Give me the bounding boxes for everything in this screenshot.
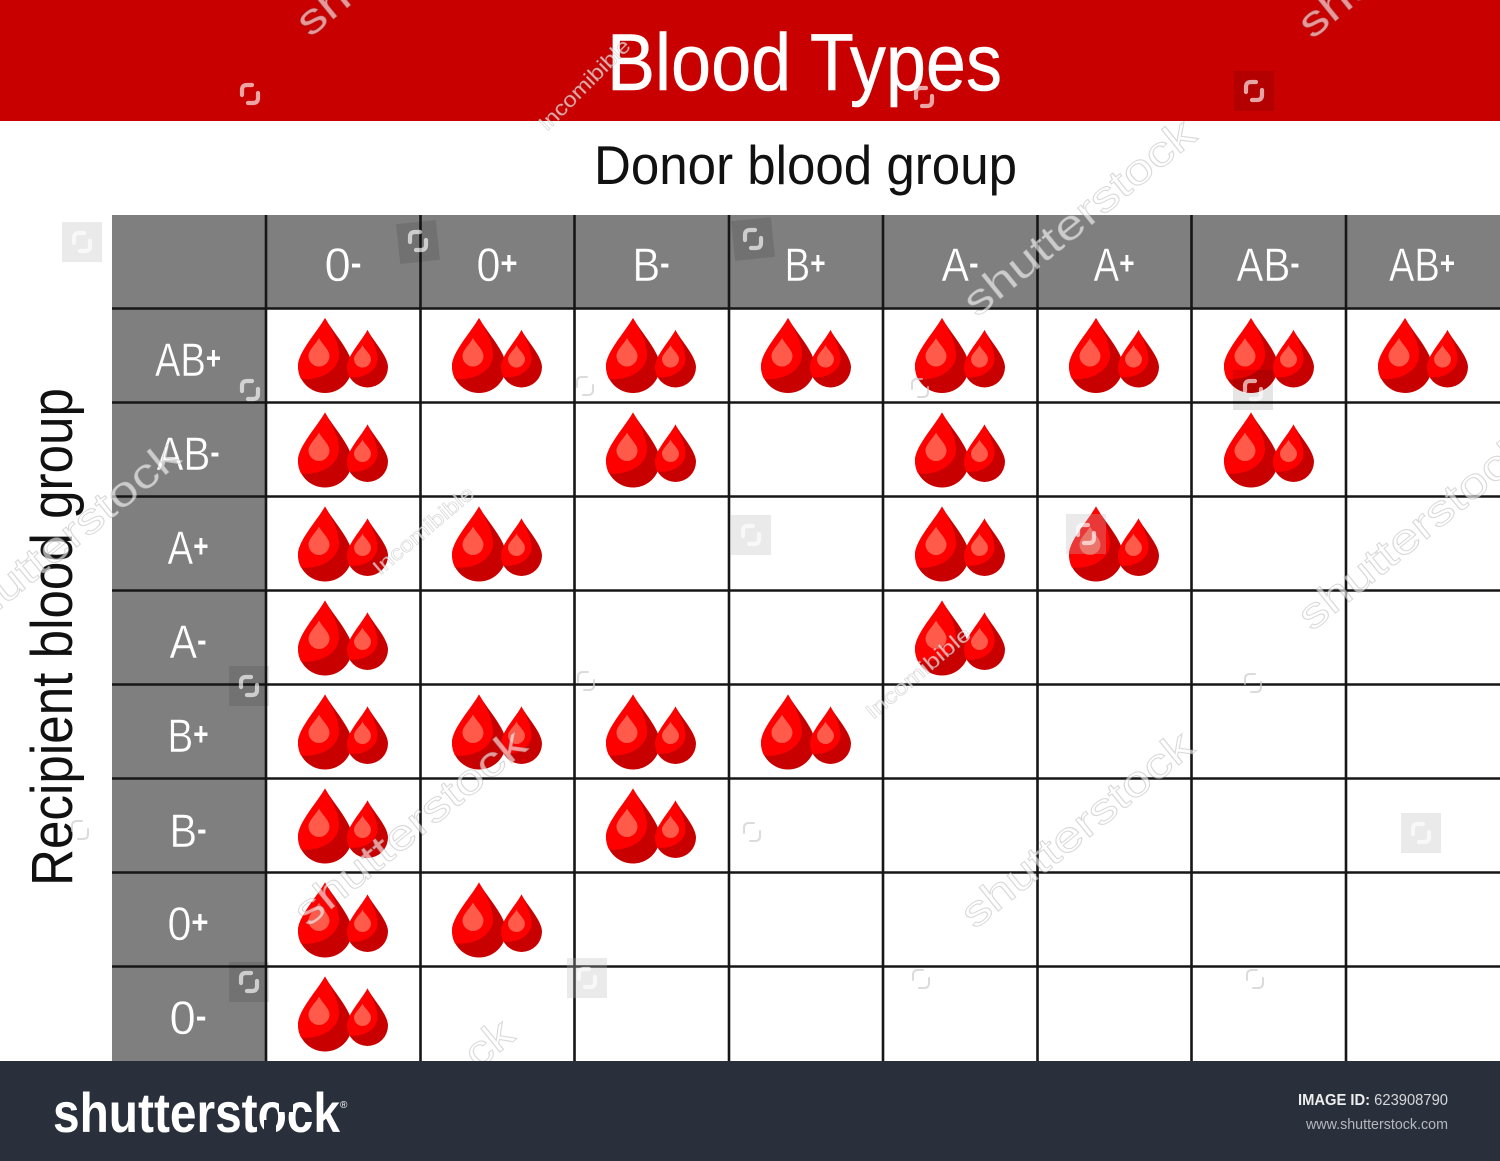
- logo registered mark: ®: [340, 1100, 348, 1111]
- image id: IMAGE ID: 623908790: [1298, 1092, 1448, 1109]
- donor column labels: 0: [476, 238, 503, 291]
- heading: recipient blood group: Recipient blood group: [20, 388, 85, 886]
- header column background: [112, 308, 266, 1061]
- recipient row labels: B: [170, 804, 201, 857]
- donor column labels: AB: [1389, 238, 1452, 291]
- watermark layer: shutterstock: [1288, 422, 1500, 639]
- recipient row labels: -: [197, 622, 206, 658]
- recipient row labels: B: [168, 709, 199, 762]
- donor column labels: [324, 238, 1455, 291]
- table grid lines: [112, 215, 1500, 1061]
- watermark layer: shutterstock: [953, 108, 1205, 325]
- row B+ drops: [298, 694, 851, 770]
- recipient row labels: -: [197, 811, 206, 847]
- donor column labels: -: [969, 245, 978, 281]
- recipient row labels: A: [170, 615, 201, 668]
- donor column labels: +: [810, 245, 826, 281]
- recipient row labels: [155, 333, 221, 1044]
- donor column labels: B: [784, 238, 816, 291]
- row 0+ drops: [298, 882, 542, 958]
- row AB+ drops: [298, 318, 1468, 393]
- footer bar: [0, 1061, 1500, 1161]
- donor column labels: A: [942, 238, 973, 291]
- watermark layer: Incomibible: [368, 482, 479, 580]
- donor column labels: AB: [1236, 238, 1299, 291]
- row B- drops: [298, 788, 696, 864]
- recipient row labels: 0: [170, 991, 196, 1044]
- recipient row labels: 0: [168, 897, 194, 950]
- recipient row labels: +: [193, 716, 208, 752]
- recipient row labels: AB: [155, 333, 218, 386]
- watermark layer: ck: [454, 1008, 523, 1077]
- row AB- drops: [298, 412, 1314, 488]
- donor column labels: -: [1290, 245, 1300, 281]
- donor column labels: A: [1094, 238, 1125, 291]
- recipient row labels: +: [193, 528, 208, 564]
- website: www.shutterstock.com: [1305, 1117, 1448, 1133]
- recipient row labels: +: [206, 340, 221, 376]
- watermark layer: Incomibible: [861, 623, 976, 724]
- recipient row labels: -: [210, 434, 220, 470]
- recipient row labels: AB: [156, 427, 219, 480]
- row A+ drops: [298, 506, 1159, 582]
- title: Blood Types: [607, 18, 1002, 108]
- watermark layer: shutterstock: [284, 718, 536, 935]
- watermark layer: shutterstock: [951, 720, 1203, 937]
- donor column labels: -: [351, 245, 362, 281]
- recipient row labels: -: [196, 998, 206, 1034]
- recipient row labels: +: [191, 904, 208, 940]
- row A- drops: [298, 600, 1005, 676]
- donor column labels: +: [1440, 245, 1455, 281]
- row 0- drop: [298, 976, 388, 1052]
- blood drop compatibility marks: [298, 318, 1468, 1052]
- donor column labels: -: [660, 245, 670, 281]
- donor column labels: +: [500, 245, 518, 281]
- donor column labels: B: [632, 238, 664, 291]
- header row background: [112, 215, 1500, 308]
- title banner: [0, 0, 1500, 121]
- recipient row labels: A: [168, 521, 199, 574]
- footer logo: shutterstock: [53, 1081, 341, 1144]
- donor column labels: 0: [324, 238, 351, 291]
- watermark layer: Incomibible: [534, 34, 635, 136]
- heading: donor blood group: Donor blood group: [594, 134, 1017, 196]
- donor column labels: +: [1119, 245, 1134, 281]
